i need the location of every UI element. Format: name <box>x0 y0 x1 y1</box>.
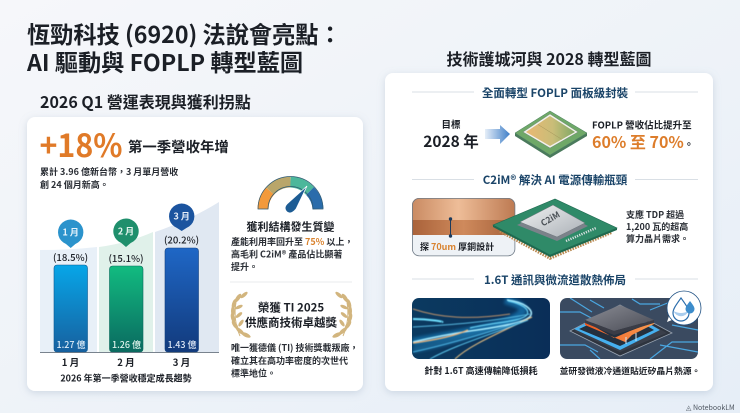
section heading: 1.6T: 1.6T 通訊與微流道散熱佈局 <box>484 272 626 288</box>
FOPLP share text <box>592 118 694 153</box>
heading: technology moat: 技術護城河與 2028 轉型藍圖 <box>446 46 652 70</box>
FOPLP share text: FOPLP 營收佔比提升至 <box>592 118 692 132</box>
copper layer diagram <box>412 198 515 256</box>
icon: C2iM chip <box>493 199 617 258</box>
target year: 目標 <box>441 117 461 131</box>
award text: 確立其在高功率密度的次世代 <box>231 354 348 367</box>
icon: laurel right <box>332 291 353 339</box>
NotebookLM mark: ◬ NotebookLM <box>686 403 735 413</box>
bar: February: 2 月 <box>118 224 134 238</box>
award heading: 榮獲 TI 2025 <box>258 300 324 316</box>
icon: laurel left <box>230 291 251 339</box>
award heading: 供應商技術卓越獎 <box>245 314 337 330</box>
title <box>26 16 342 78</box>
profit structure text <box>231 235 353 273</box>
bar: January: (18.5%) <box>53 250 88 264</box>
bar: February: 1.26 億 <box>112 338 141 351</box>
revenue note <box>40 165 178 191</box>
target year: 2028 年 <box>423 130 479 152</box>
C2iM power text: 算力晶片需求。 <box>626 232 689 245</box>
bar: March: 3 月 <box>174 210 190 222</box>
title: 恆勁科技 (6920) 法說會亮點： <box>27 16 342 50</box>
icon: C2iM chip: C2iM <box>538 208 562 229</box>
bar: January: 1.27 億 <box>56 338 86 351</box>
heading: Q1 performance: 2026 Q1 營運表現與獲利拐點 <box>40 89 251 113</box>
image: high-speed light streaks <box>412 298 550 359</box>
bar: January: 1 月 <box>63 226 79 238</box>
revenue note: 創 24 個月新高。 <box>40 178 109 191</box>
bar: February: (15.1%) <box>108 251 144 265</box>
revenue growth label: 第一季營收年增 <box>128 136 229 157</box>
caption: 1.6T: 針對 1.6T 高速傳輸降低損耗 <box>424 364 538 377</box>
revenue note: 累計 3.96 億新台幣，3 月單月營收 <box>40 165 178 178</box>
icon: gauge <box>258 177 323 213</box>
image: microfluidic cooling chip <box>560 298 698 359</box>
section heading: C2iM: C2iM® 解決 AI 電源傳輸瓶頸 <box>483 172 628 188</box>
bar: January <box>53 220 88 352</box>
C2iM power text <box>626 208 689 245</box>
copper layer diagram: 探 70um 厚銅設計 <box>420 240 494 253</box>
award text: 唯一獲德儀 (TI) 技術獎載叛廠， <box>231 341 358 354</box>
axis labels: 1 月 <box>62 355 79 369</box>
panel: technology moat <box>385 73 713 391</box>
bar: March: 1.43 億 <box>167 338 197 351</box>
section heading: FOPLP: 全面轉型 FOPLP 面板級封裝 <box>482 85 629 101</box>
FOPLP share text: 60% 至 70%。 <box>592 129 694 153</box>
bar: March: (20.2%) <box>164 232 199 246</box>
revenue growth figure: +18% <box>40 121 122 167</box>
profit structure text: 提升。 <box>231 260 258 273</box>
caption: cooling: 並研發微液冷通道貼近矽晶片熱源。 <box>560 364 700 377</box>
C2iM power text: 1,200 瓦的超高 <box>626 220 688 233</box>
target year <box>423 117 479 152</box>
icon: FOPLP chip <box>515 111 587 158</box>
C2iM power text: 支應 TDP 超過 <box>626 208 684 221</box>
title: AI 驅動與 FOPLP 轉型藍圖 <box>26 44 303 78</box>
panel: Q1 performance <box>27 117 363 391</box>
bar: March <box>164 204 199 352</box>
bar chart: monthly revenue <box>40 202 219 384</box>
award text <box>231 341 358 380</box>
profit structure text: 高毛利 C2iM® 產品佔比顯著 <box>231 248 342 260</box>
axis labels: 3 月 <box>173 355 190 369</box>
arrow <box>485 125 510 144</box>
axis labels <box>62 355 190 369</box>
profit structure heading: 獲利結構發生質變 <box>246 218 334 234</box>
axis labels: 2 月 <box>117 355 135 369</box>
bar: February <box>108 219 144 352</box>
chart caption: 2026 年第一季營收穩定成長趨勢 <box>60 372 192 384</box>
award heading <box>245 300 337 330</box>
award text: 標準地位。 <box>231 366 276 380</box>
profit structure text: 產能利用率回升至 75% 以上， <box>231 235 353 248</box>
icon: water drops <box>667 291 701 325</box>
